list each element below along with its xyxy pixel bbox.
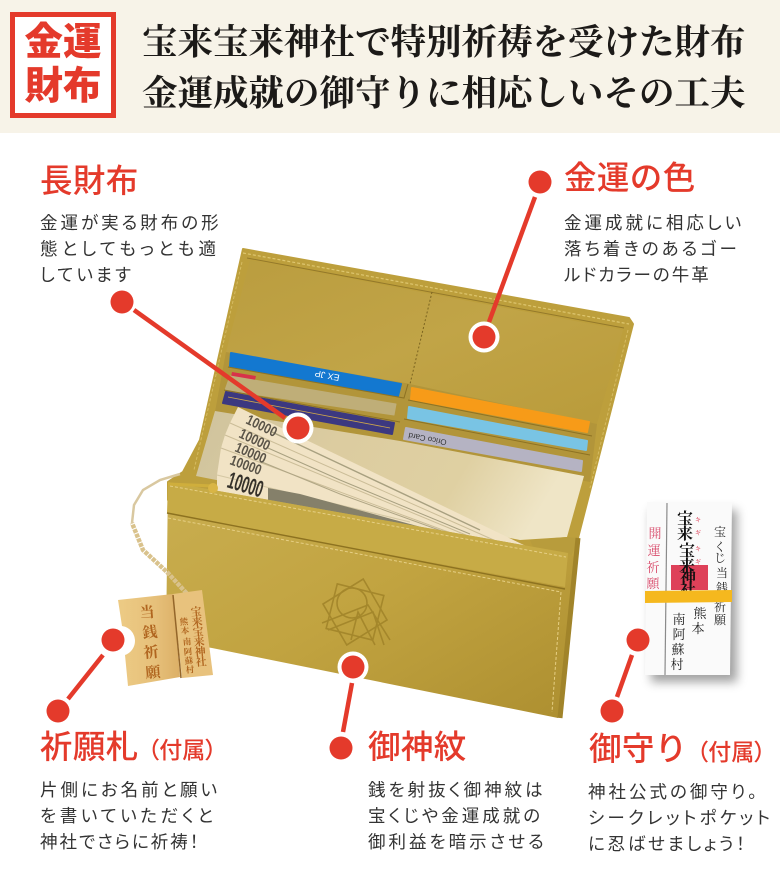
text: 御守り description: に忍ばせましょう！: [588, 834, 748, 854]
text: 御神紋 description: [368, 780, 547, 852]
text: 金運の色 description: 落ち着きのあるゴー: [564, 239, 740, 259]
wooden prayer tag: 来: [193, 634, 205, 649]
badge: 金運財布: 財布: [24, 65, 102, 108]
card slots and cards: [215, 352, 597, 482]
banknotes: 10000: [228, 452, 264, 478]
omamori charm: 村: [670, 657, 684, 672]
banknotes: [217, 407, 530, 548]
wooden prayer tag: 宝: [192, 624, 204, 639]
omamori charm: 宝: [679, 542, 695, 560]
heading: 長財布: 長財布: [40, 163, 139, 199]
omamori charm: 来: [679, 557, 695, 575]
wooden prayer tag: 阿: [183, 646, 193, 657]
omamori charm: 来: [677, 525, 693, 543]
text: 金運の色 description: [564, 213, 744, 285]
silver card: [404, 428, 582, 471]
omamori charm: 社: [680, 581, 696, 599]
wooden prayer tag: 銭: [142, 623, 158, 642]
heading: 祈願札: 祈願札 （付属）: [40, 729, 217, 765]
callout: 金運の色 pointer: [468, 170, 552, 352]
text: 御神紋 description: 銭を射抜く御神紋は: [368, 780, 546, 800]
text: 御神紋 description: 宝くじや金運成就の: [368, 806, 543, 826]
wooden prayer tag: 蘇: [184, 655, 194, 666]
text: 祈願札 description: 片側にお名前と願い: [40, 780, 220, 800]
text: 御守り description: [588, 782, 773, 854]
omamori charm: 宝: [677, 510, 693, 528]
wallet front pocket: [166, 482, 578, 718]
omamori charm: 銭: [716, 580, 728, 595]
rope: [132, 474, 190, 597]
gold lining: [196, 411, 584, 540]
wooden prayer tag: 祈: [143, 643, 159, 662]
omamori charm: 本: [691, 621, 705, 636]
omamori charm: 願: [714, 613, 727, 627]
wooden prayer tag: 熊: [179, 616, 189, 627]
banknotes: 10000: [244, 411, 280, 440]
callout: 長財布 pointer: [110, 290, 314, 444]
gold card: [225, 376, 396, 415]
card slots and cards: Orico Card: [408, 431, 447, 447]
title heading: [142, 22, 746, 113]
wooden prayer tag: 南: [182, 636, 192, 647]
text: 長財布 description: [40, 213, 222, 285]
omamori charm: ギ: [695, 559, 701, 566]
text: 長財布 description: しています: [40, 265, 134, 285]
title heading: 宝来宝来神社で特別祈祷を受けた財布: [142, 22, 746, 62]
wooden prayer tag: 宝: [190, 604, 202, 619]
callout: 祈願札 pointer: [46, 625, 128, 722]
card slots and cards: EX JP: [314, 368, 340, 383]
banknotes: 10000: [233, 439, 269, 467]
omamori charm: 当: [716, 565, 728, 580]
text: 金運の色 description: 金運成就に相応しい: [564, 213, 744, 233]
omamori charm: キ: [695, 546, 701, 553]
text: 祈願札 description: 神社でさらに祈祷！: [40, 832, 201, 852]
heading: 御神紋: 御神紋: [368, 729, 467, 765]
omamori charm: く: [714, 540, 726, 554]
omamori charm: 運: [647, 543, 661, 558]
wooden prayer tag: 本: [180, 625, 190, 636]
callout: 御守り pointer: [600, 628, 650, 722]
light blue card: [408, 407, 587, 450]
omamori charm: [645, 502, 737, 682]
wooden prayer tag: 社: [195, 654, 207, 669]
omamori charm: 南: [672, 612, 686, 627]
orange card: [411, 388, 589, 432]
text: 祈願札 description: を書いていただくと: [40, 806, 217, 826]
text: 御神紋 description: 御利益を暗示させる: [368, 832, 547, 852]
banknotes: 10000: [237, 425, 273, 454]
blue card: [230, 353, 401, 396]
emblem: [315, 571, 395, 653]
heading: 金運の色: 金運の色: [564, 160, 696, 196]
navy card: [223, 392, 394, 434]
omamori charm: 祈: [646, 560, 660, 575]
text: 長財布 description: 金運が実る財布の形: [40, 213, 222, 233]
text: 御守り description: シークレットポケット: [588, 808, 773, 828]
omamori charm: 蘇: [671, 642, 685, 657]
text: 御守り description: 神社公式の御守り。: [588, 782, 760, 802]
omamori charm: 神: [680, 568, 696, 587]
title heading: 金運成就の御守りに相応しいその工夫: [142, 73, 746, 113]
wooden prayer tag: [118, 590, 213, 686]
wooden prayer tag: 村: [185, 664, 195, 675]
omamori charm: 熊: [693, 606, 707, 621]
text: 長財布 description: 態としてもっとも適: [40, 239, 220, 259]
badge: 金運財布: [10, 12, 116, 118]
callout: 御神紋 pointer: [330, 652, 368, 760]
omamori charm: 宝: [714, 524, 726, 539]
omamori charm: 祈: [714, 599, 726, 614]
wallet back panel: [168, 249, 633, 575]
pink card corner: [230, 372, 256, 384]
wooden prayer tag: 来: [191, 614, 203, 629]
wooden prayer tag: 神: [194, 644, 206, 659]
omamori charm: 阿: [672, 627, 686, 642]
omamori charm: ギ: [695, 530, 701, 537]
banknotes: 10000: [224, 468, 266, 503]
text: 金運の色 description: ルドカラーの牛革: [564, 265, 711, 285]
wooden prayer tag: 当: [139, 603, 155, 622]
wooden prayer tag: 願: [145, 664, 162, 682]
header band: [0, 0, 780, 133]
omamori charm: キ: [695, 517, 701, 524]
omamori charm: じ: [714, 551, 726, 565]
heading: 御守り: 御守り （付属）: [589, 731, 766, 767]
omamori charm: 願: [646, 576, 660, 591]
badge: 金運財布: 金運: [24, 21, 102, 64]
text: 祈願札 description: [40, 780, 220, 852]
omamori charm: 開: [648, 526, 662, 541]
right loop detail: [530, 537, 578, 560]
